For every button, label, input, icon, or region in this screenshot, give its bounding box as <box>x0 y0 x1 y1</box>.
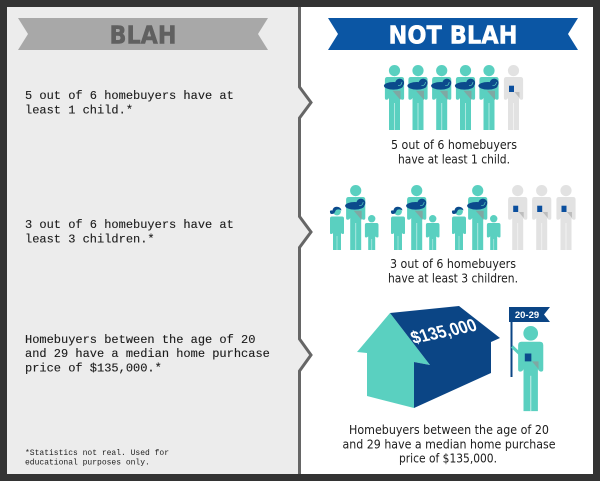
heading: not blah ribbon <box>328 18 578 50</box>
pictogram: 5 of 6 with a child <box>384 65 523 130</box>
heading: blah ribbon: BLAH <box>110 20 176 50</box>
text: plain statistic two: 3 out of 6 homebuyers have at <box>25 218 234 232</box>
caption: statistic three: and 29 have a median home purchase <box>342 437 556 451</box>
icon: person holding age flag: 20-29 <box>515 310 539 321</box>
text: plain statistic three: price of $135,000.* <box>25 361 162 375</box>
panel: not blah <box>300 7 593 474</box>
caption: statistic one: have at least 1 child. <box>398 152 510 166</box>
text: footnote: educational purposes only. <box>25 458 150 468</box>
text: plain statistic one: 5 out of 6 homebuyers have at <box>25 89 234 103</box>
text: plain statistic one: least 1 child.* <box>25 103 133 117</box>
icon: house with price on roof: $135,000 <box>408 315 480 348</box>
text: plain statistic three: Homebuyers between the age of 20 <box>25 333 255 347</box>
pictogram: 3 of 6 with three children <box>330 185 576 250</box>
text: plain statistic three: and 29 have a median home purhcase <box>25 347 270 361</box>
panel: blah <box>7 7 311 474</box>
caption: statistic three: price of $135,000. <box>399 452 497 466</box>
icon: house with price on roof <box>357 306 500 408</box>
text: plain statistic two: least 3 children.* <box>25 233 155 247</box>
heading: not blah ribbon: NOT BLAH <box>388 20 518 50</box>
caption: statistic two: 3 out of 6 homebuyers <box>390 257 516 271</box>
heading: blah ribbon <box>18 18 268 50</box>
caption: statistic one: 5 out of 6 homebuyers <box>391 138 517 152</box>
text: footnote: *Statistics not real. Used for <box>25 449 169 458</box>
caption: statistic three: Homebuyers between the age of 20 <box>349 423 549 437</box>
caption: statistic two: have at least 3 children. <box>388 271 518 285</box>
icon: person holding age flag <box>509 307 550 411</box>
